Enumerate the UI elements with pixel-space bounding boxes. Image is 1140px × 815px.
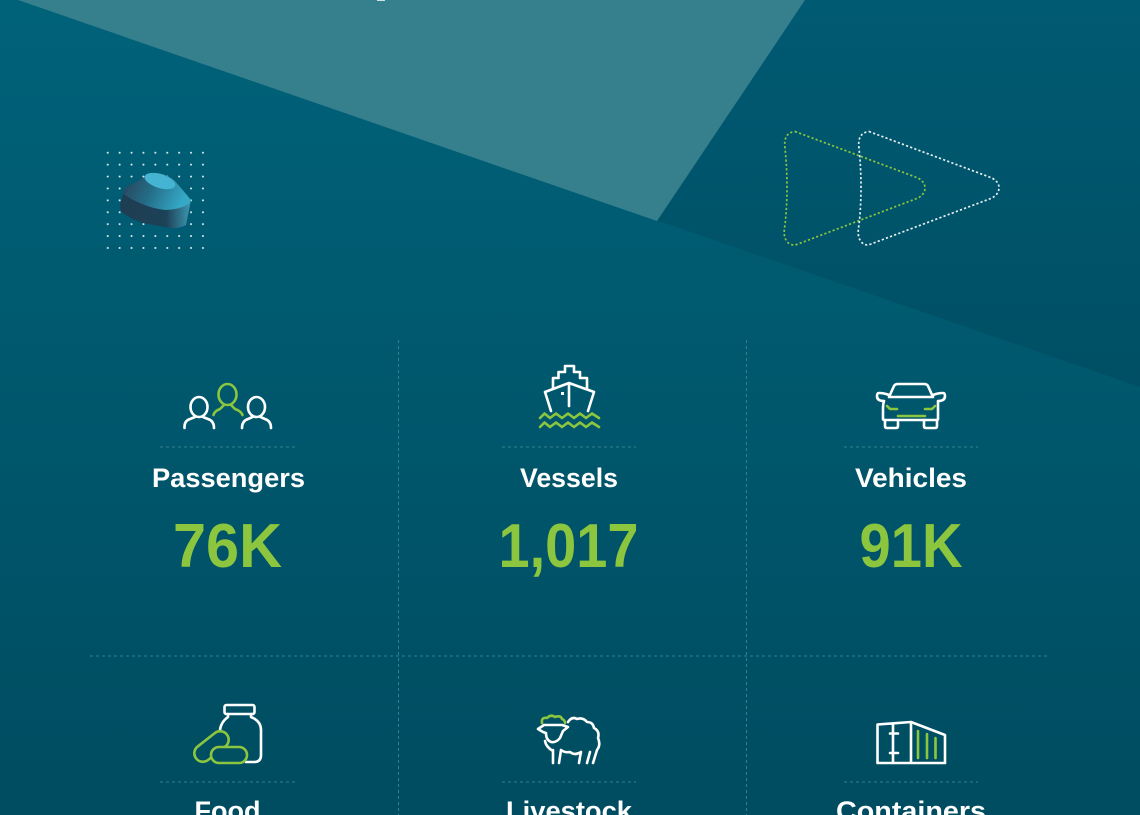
- panel: passengers: [152, 384, 305, 581]
- label: passengers: Passengers: [152, 463, 305, 493]
- label: vessels: Vessels: [520, 463, 618, 493]
- value: vehicles: 91K: [860, 512, 963, 581]
- play triangle outlines: [784, 132, 999, 245]
- icon: sheep: [538, 716, 599, 763]
- icon: ship: [540, 366, 599, 427]
- dot grid with 3D shape: [102, 147, 209, 254]
- icon: shipping container: [878, 722, 945, 763]
- white triangle: [858, 132, 999, 245]
- background shape: light panel: [18, 0, 805, 221]
- background shape: upper right: [18, 0, 1140, 387]
- icon: car: [877, 384, 945, 428]
- panel: food: [191, 705, 261, 815]
- label: vehicles: Vehicles: [855, 463, 967, 493]
- icon: people: [184, 384, 271, 428]
- 3D shape: [120, 170, 191, 228]
- value: vessels: 1,017: [498, 512, 638, 581]
- panel: vehicles: [855, 384, 967, 581]
- panel: livestock: [506, 716, 633, 815]
- grid dividers: [90, 340, 1047, 815]
- panel: vessels: [498, 366, 638, 581]
- green triangle: [784, 132, 925, 245]
- icon: jar and pills: [191, 705, 261, 765]
- clipped title fragment: [377, 0, 385, 1]
- value: passengers: 76K: [173, 512, 282, 581]
- panel: containers: [836, 722, 986, 815]
